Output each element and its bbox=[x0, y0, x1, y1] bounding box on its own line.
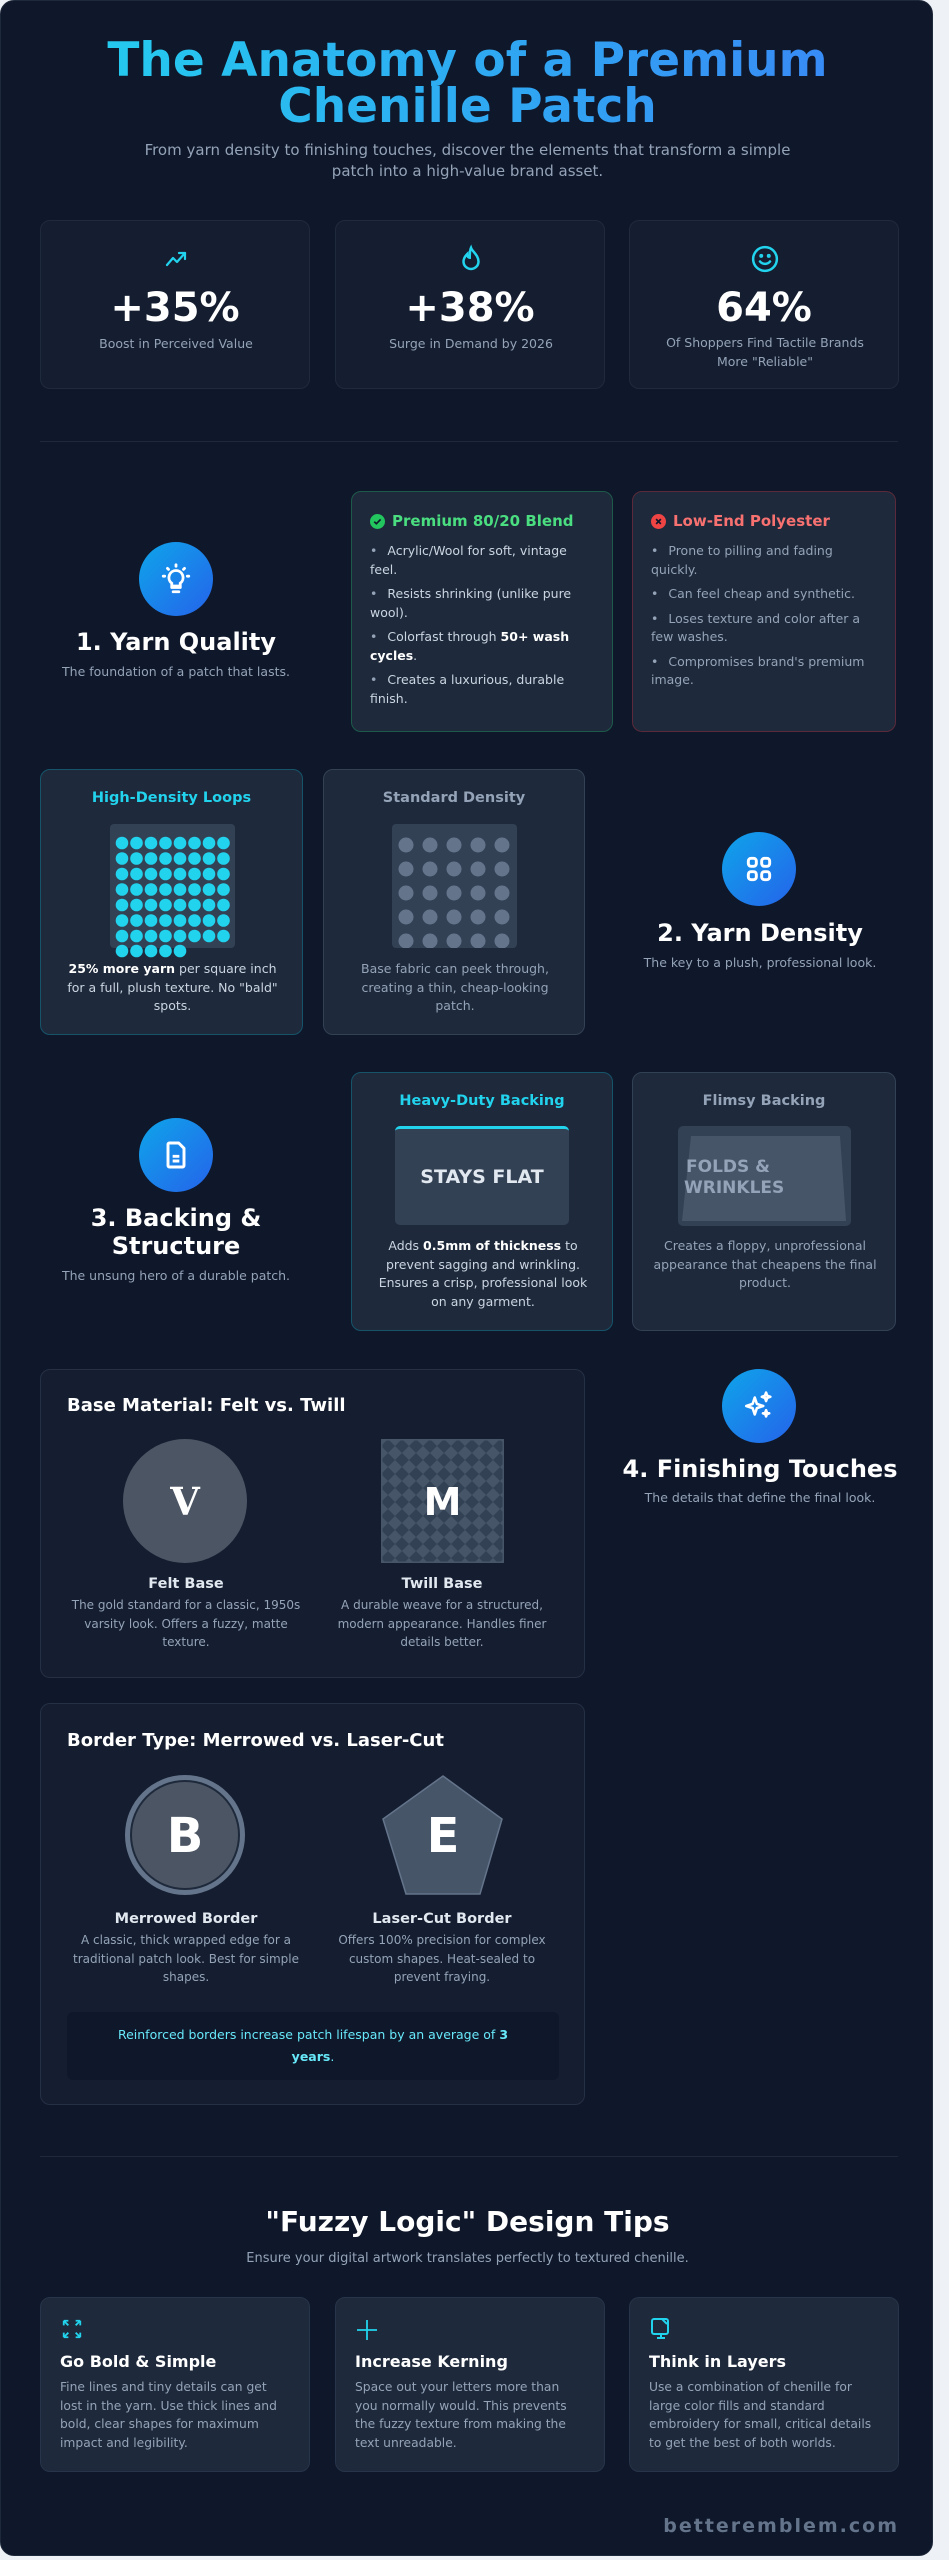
description: Base fabric can peek through, creating a thin, cheap-looking patch. bbox=[361, 961, 549, 1013]
subheading: The foundation of a patch that lasts. bbox=[62, 664, 290, 679]
bullet list: Colorfast through 50+ wash cycles. bbox=[370, 629, 569, 662]
stat label: Boost in Perceived Value bbox=[99, 336, 253, 351]
stat card: demand bbox=[335, 220, 605, 389]
icon: smile bbox=[752, 246, 778, 272]
subheading: The unsung hero of a durable patch. bbox=[62, 1268, 290, 1283]
felt sample bbox=[123, 1439, 247, 1563]
wrinkled patch illustration: FOLDS & bbox=[686, 1157, 770, 1177]
merrowed sample: B bbox=[167, 1808, 203, 1864]
callout: Reinforced borders increase patch lifespan by an average of 3 years. bbox=[118, 2027, 508, 2064]
twill sample bbox=[381, 1439, 504, 1563]
tip title: Go Bold & Simple bbox=[60, 2352, 216, 2371]
panel: high-density loops bbox=[40, 769, 303, 1035]
card title: Premium 80/20 Blend bbox=[392, 512, 573, 530]
heading bbox=[91, 1204, 261, 1260]
heading: 4. Finishing Touches bbox=[623, 1455, 897, 1483]
panel heading: Border Type: Merrowed vs. Laser-Cut bbox=[67, 1730, 444, 1751]
felt description: The gold standard for a classic, 1950s varsity look. Offers a fuzzy, matte texture. bbox=[72, 1598, 300, 1649]
panel: border type bbox=[40, 1703, 585, 2105]
icon: sparkles bbox=[722, 1369, 796, 1443]
description: 25% more yarn per square inch for a full, plush texture. No "bald" spots. bbox=[67, 961, 278, 1013]
wrinkled patch illustration: WRINKLES bbox=[684, 1178, 784, 1198]
card title: Heavy-Duty Backing bbox=[399, 1093, 565, 1109]
icon: flame bbox=[462, 244, 480, 270]
stat label: Of Shoppers Find Tactile Brands More "Reliable" bbox=[666, 335, 864, 368]
description: Adds 0.5mm of thickness to prevent sagging and wrinkling. Ensures a crisp, professional look on any garment. bbox=[379, 1238, 587, 1308]
icon: grid bbox=[722, 832, 796, 906]
footer brand: betteremblem.com bbox=[663, 2515, 899, 2537]
subheading: The key to a plush, professional look. bbox=[644, 955, 876, 970]
wrinkled patch illustration bbox=[678, 1126, 851, 1226]
merrowed label: Merrowed Border bbox=[115, 1911, 257, 1927]
heading: Structure bbox=[112, 1232, 240, 1260]
flat patch illustration bbox=[395, 1126, 569, 1225]
tip text: Use a combination of chenille for large color fills and standard embroidery for small, critical details to get the best of both worlds. bbox=[649, 2380, 871, 2450]
stat label: Surge in Demand by 2026 bbox=[389, 336, 553, 351]
heading: 1. Yarn Quality bbox=[76, 628, 276, 656]
tip title: Think in Layers bbox=[649, 2352, 786, 2371]
heading: 3. Backing & bbox=[91, 1204, 261, 1232]
tip card: layers bbox=[629, 2297, 899, 2472]
icon: plus bbox=[357, 2320, 377, 2340]
icon: lightbulb bbox=[139, 542, 213, 616]
dense dot grid bbox=[110, 824, 235, 958]
tip text: Space out your letters more than you normally would. This prevents the fuzzy texture from making the text unreadable. bbox=[355, 2380, 567, 2450]
stat card: perceived value bbox=[40, 220, 310, 389]
felt label: Felt Base bbox=[148, 1576, 224, 1592]
bullet list: Creates a luxurious, durable finish. bbox=[370, 672, 564, 706]
panel: premium blend bbox=[351, 491, 613, 732]
icon: layers monitor bbox=[651, 2318, 669, 2339]
callout bbox=[67, 2012, 559, 2080]
icon: document bbox=[139, 1118, 213, 1192]
section 3 heading block: Backing bbox=[62, 1118, 290, 1283]
bullet list bbox=[651, 543, 864, 687]
title: Chenille Patch bbox=[278, 79, 657, 134]
panel: low-end polyester bbox=[632, 491, 896, 732]
subtitle: From yarn density to finishing touches, discover the elements that transform a simple patch into a high-value brand asset. bbox=[145, 141, 790, 180]
bullet list: Acrylic/Wool for soft, vintage feel. bbox=[370, 543, 567, 576]
stat card: shoppers bbox=[629, 220, 899, 389]
laser-cut sample bbox=[382, 1775, 503, 1895]
tip card: bold & simple bbox=[40, 2297, 310, 2472]
twill description: A durable weave for a structured, modern appearance. Handles finer details better. bbox=[338, 1598, 546, 1649]
laser-cut sample: E bbox=[427, 1808, 459, 1864]
panel: standard density bbox=[323, 769, 585, 1035]
card title: Standard Density bbox=[383, 790, 525, 806]
bullet list: Prone to pilling and fading quickly. bbox=[651, 543, 833, 576]
subheading: The details that define the final look. bbox=[645, 1490, 875, 1505]
section 4 heading block: Finishing Touches bbox=[623, 1369, 897, 1505]
card title: High-Density Loops bbox=[92, 790, 251, 806]
twill sample: M bbox=[424, 1480, 461, 1524]
tips heading: "Fuzzy Logic" Design Tips bbox=[265, 2205, 670, 2238]
title bbox=[1, 38, 934, 130]
card title: Low-End Polyester bbox=[673, 512, 830, 530]
tips subheading: Ensure your digital artwork translates perfectly to textured chenille. bbox=[246, 2251, 689, 2266]
laser description: Offers 100% precision for complex custom shapes. Heat-sealed to prevent fraying. bbox=[338, 1933, 546, 1984]
section 2 heading block: Yarn Density bbox=[644, 832, 876, 970]
flat patch illustration: STAYS FLAT bbox=[420, 1166, 544, 1188]
stat number: +35% bbox=[110, 285, 240, 331]
bullet list: Can feel cheap and synthetic. bbox=[668, 586, 855, 601]
sparse dot grid bbox=[392, 824, 517, 948]
twill label: Twill Base bbox=[402, 1576, 482, 1592]
panel: base material bbox=[40, 1369, 585, 1678]
stat number: +38% bbox=[405, 285, 535, 331]
bullet list: Compromises brand's premium image. bbox=[651, 654, 864, 687]
merrowed sample bbox=[125, 1775, 245, 1895]
title: The Anatomy of a Premium bbox=[107, 33, 828, 88]
icon: trending up bbox=[166, 252, 186, 266]
merrowed description: A classic, thick wrapped edge for a traditional patch look. Best for simple shapes. bbox=[73, 1933, 299, 1984]
stat number: 64% bbox=[716, 285, 812, 331]
icon: expand arrows bbox=[62, 2320, 82, 2338]
tip card: kerning bbox=[335, 2297, 605, 2472]
felt sample: V bbox=[170, 1478, 200, 1524]
bullet list: Loses texture and color after a few washes. bbox=[651, 610, 860, 644]
laser label: Laser-Cut Border bbox=[372, 1911, 512, 1927]
description: Creates a floppy, unprofessional appearance that cheapens the final product. bbox=[653, 1238, 877, 1290]
bullet list: Resists shrinking (unlike pure wool). bbox=[370, 586, 571, 620]
panel: flimsy backing bbox=[632, 1072, 896, 1331]
bullet list bbox=[370, 543, 571, 706]
tip title: Increase Kerning bbox=[355, 2352, 508, 2371]
tip text: Fine lines and tiny details can get lost in the yarn. Use thick lines and bold, clear shapes for maximum impact and legibility. bbox=[60, 2380, 277, 2450]
panel heading: Base Material: Felt vs. Twill bbox=[67, 1395, 346, 1416]
heading: 2. Yarn Density bbox=[657, 919, 863, 947]
panel: heavy-duty backing bbox=[351, 1072, 613, 1331]
card title: Flimsy Backing bbox=[703, 1093, 825, 1109]
section 1 heading block: Yarn Quality bbox=[62, 542, 290, 679]
